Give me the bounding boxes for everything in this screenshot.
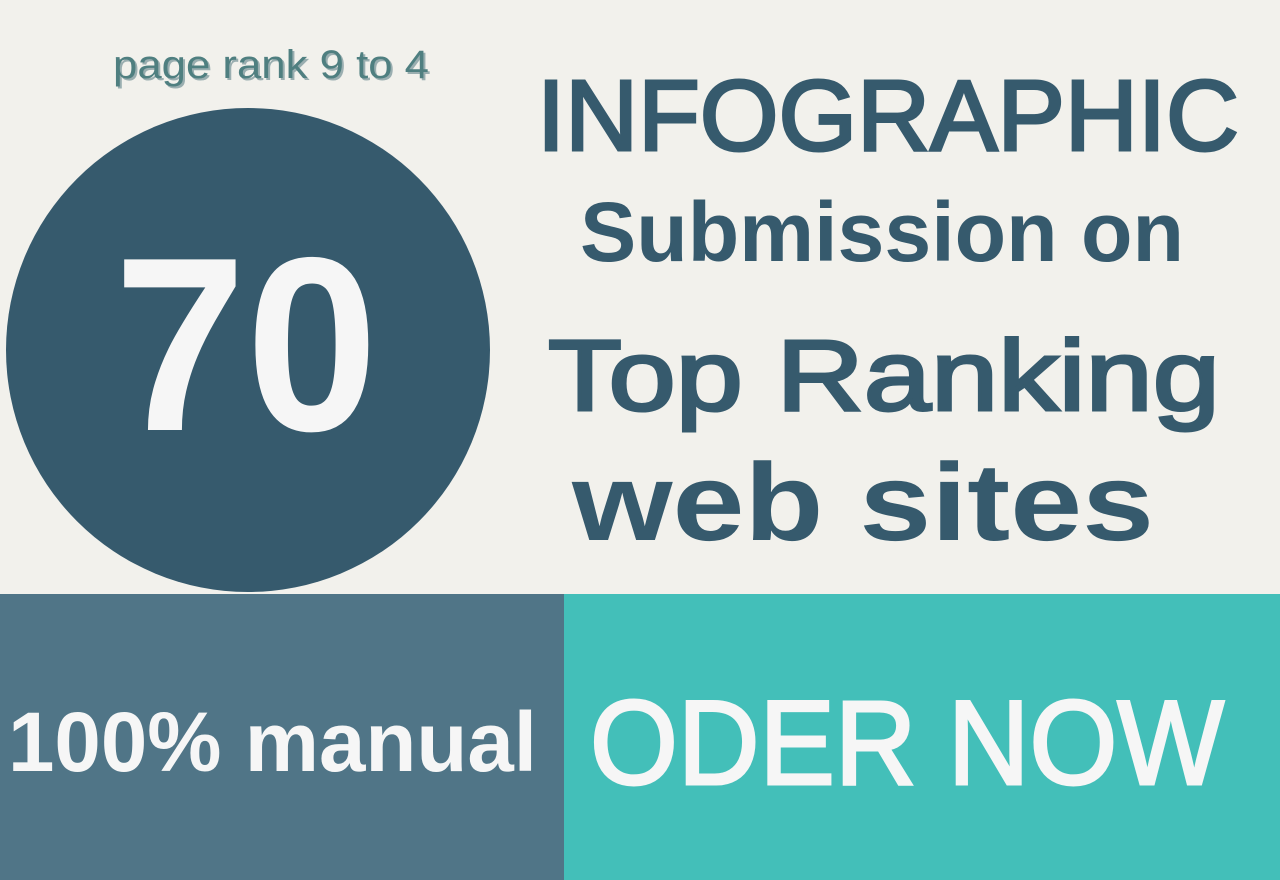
panel: 100% manual: 100% manual bbox=[8, 695, 537, 789]
heading: Top Ranking: Top Ranking bbox=[548, 320, 1220, 432]
panel: order now bbox=[564, 594, 1280, 880]
heading: INFOGRAPHIC: INFOGRAPHIC bbox=[537, 60, 1239, 172]
panel: 100% manual bbox=[0, 594, 564, 880]
heading: web sites: web sites bbox=[571, 441, 1154, 564]
subtitle: page rank: page rank 9 to 4 bbox=[115, 45, 431, 89]
circle badge with number 70: 70 bbox=[114, 205, 378, 483]
circle badge with number 70 bbox=[6, 108, 490, 592]
heading: Submission on: Submission on bbox=[580, 185, 1184, 279]
panel: order now: ODER NOW bbox=[590, 676, 1224, 810]
subtitle: page rank: page rank 9 to 4 bbox=[113, 43, 429, 87]
